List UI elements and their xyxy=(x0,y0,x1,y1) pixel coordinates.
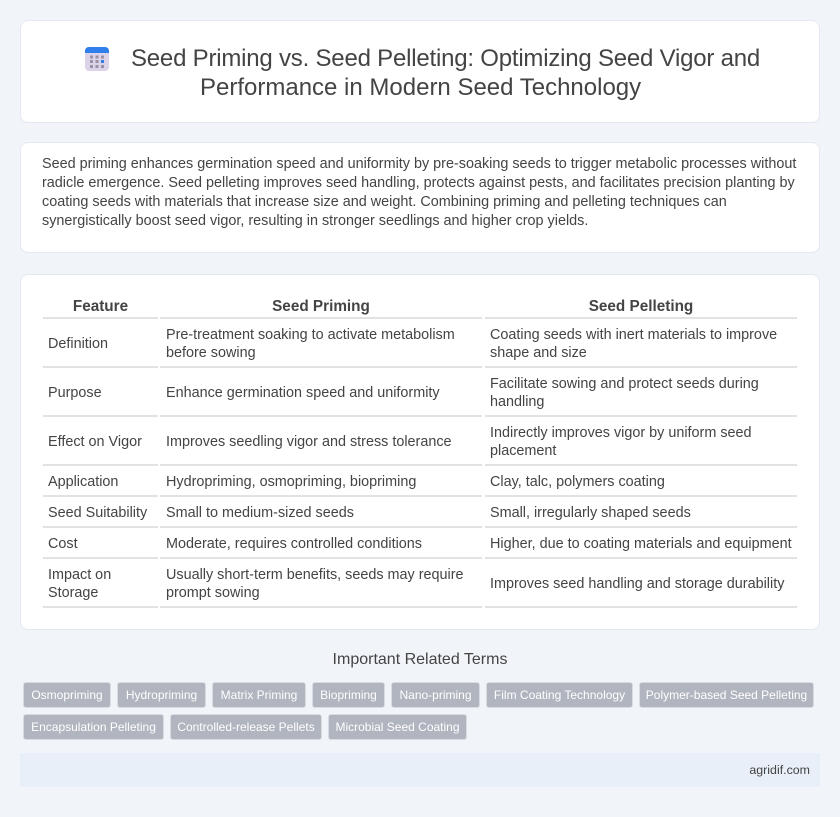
intro paragraph panel xyxy=(20,142,820,253)
tag: Polymer-based Seed Pelleting xyxy=(646,688,807,702)
row: definition: shape and size xyxy=(490,345,587,361)
intro paragraph text: Seed priming enhances germination speed and uniformity by pre-soaking seeds to trigger metabolic processes without xyxy=(42,156,796,172)
tag xyxy=(23,682,111,708)
row: impact on storage: Impact on xyxy=(48,567,111,583)
icon: calendar xyxy=(85,47,109,71)
header panel xyxy=(20,20,820,123)
row: effect on vigor: Improves seedling vigor and stress tolerance xyxy=(166,434,452,450)
comparison table xyxy=(43,298,797,608)
row: definition: before sowing xyxy=(166,345,256,361)
row: effect on vigor: placement xyxy=(490,443,556,459)
row: impact on storage xyxy=(48,567,784,601)
row: seed suitability: Small to medium-sized seeds xyxy=(166,505,354,521)
table header: Seed Pelleting xyxy=(589,298,693,315)
table header: Feature xyxy=(73,298,128,315)
tag: Osmopriming xyxy=(31,688,103,702)
tag: Hydropriming xyxy=(126,688,197,702)
row: definition: Definition xyxy=(48,336,108,352)
tag xyxy=(117,682,206,708)
tag xyxy=(212,682,306,708)
tag: Microbial Seed Coating xyxy=(335,720,460,734)
row: definition: Pre-treatment soaking to activate metabolism xyxy=(166,327,455,343)
row: purpose: Facilitate sowing and protect seeds during xyxy=(490,376,759,392)
tag: Nano-priming xyxy=(399,688,472,702)
row: purpose xyxy=(48,376,759,410)
tag xyxy=(328,714,467,740)
row: definition xyxy=(48,327,777,361)
table header: Seed Priming xyxy=(272,298,370,315)
row: effect on vigor xyxy=(48,425,752,459)
row: cost: Higher, due to coating materials and equipment xyxy=(490,536,792,552)
row: seed suitability: Seed Suitability xyxy=(48,505,147,521)
related terms heading: Important Related Terms xyxy=(333,651,507,668)
row: impact on storage: prompt sowing xyxy=(166,585,260,601)
table header xyxy=(73,298,693,315)
tag: Film Coating Technology xyxy=(494,688,625,702)
related term tags xyxy=(23,682,814,740)
row: effect on vigor: Indirectly improves vigor by uniform seed xyxy=(490,425,752,441)
tag: Biopriming xyxy=(320,688,377,702)
row: application xyxy=(48,474,665,490)
tag xyxy=(170,714,322,740)
row: cost: Cost xyxy=(48,536,78,552)
row: cost xyxy=(48,536,792,552)
row: purpose: Enhance germination speed and uniformity xyxy=(166,385,440,401)
row: purpose: Purpose xyxy=(48,385,102,401)
row: application: Application xyxy=(48,474,118,490)
row: cost: Moderate, requires controlled conditions xyxy=(166,536,422,552)
footer bar xyxy=(20,753,820,787)
tag xyxy=(486,682,633,708)
row: impact on storage: Usually short-term benefits, seeds may require xyxy=(166,567,464,583)
row: impact on storage: Storage xyxy=(48,585,98,601)
footer source: agridif.com xyxy=(749,763,810,777)
title: Performance in Modern Seed Technology xyxy=(200,74,641,101)
intro paragraph text: coating seeds with materials that increase size and weight. Combining priming and pelleting techniques can xyxy=(42,194,727,210)
row: definition: Coating seeds with inert materials to improve xyxy=(490,327,777,343)
row: purpose: handling xyxy=(490,394,544,410)
row: impact on storage: Improves seed handling and storage durability xyxy=(490,576,784,592)
tag: Controlled-release Pellets xyxy=(177,720,315,734)
row: seed suitability xyxy=(48,505,691,521)
row: effect on vigor: Effect on Vigor xyxy=(48,434,142,450)
tag: Encapsulation Pelleting xyxy=(31,720,156,734)
tag xyxy=(391,682,480,708)
tag xyxy=(639,682,814,708)
tag xyxy=(23,714,164,740)
intro paragraph text: radicle emergence. Seed pelleting improves seed handling, protects against pests, and facilitates precision planting by xyxy=(42,175,795,191)
tag: Matrix Priming xyxy=(221,688,297,702)
title: Seed Priming vs. Seed Pelleting: Optimizing Seed Vigor and xyxy=(131,45,760,72)
tag xyxy=(312,682,385,708)
intro paragraph text xyxy=(42,156,796,229)
title xyxy=(131,45,760,101)
intro paragraph text: synergistically boost seed vigor, resulting in stronger seedlings and higher crop yields. xyxy=(42,213,588,229)
row: application: Clay, talc, polymers coating xyxy=(490,474,665,490)
row: seed suitability: Small, irregularly shaped seeds xyxy=(490,505,691,521)
row: application: Hydropriming, osmopriming, biopriming xyxy=(166,474,416,490)
comparison table panel xyxy=(20,274,820,630)
